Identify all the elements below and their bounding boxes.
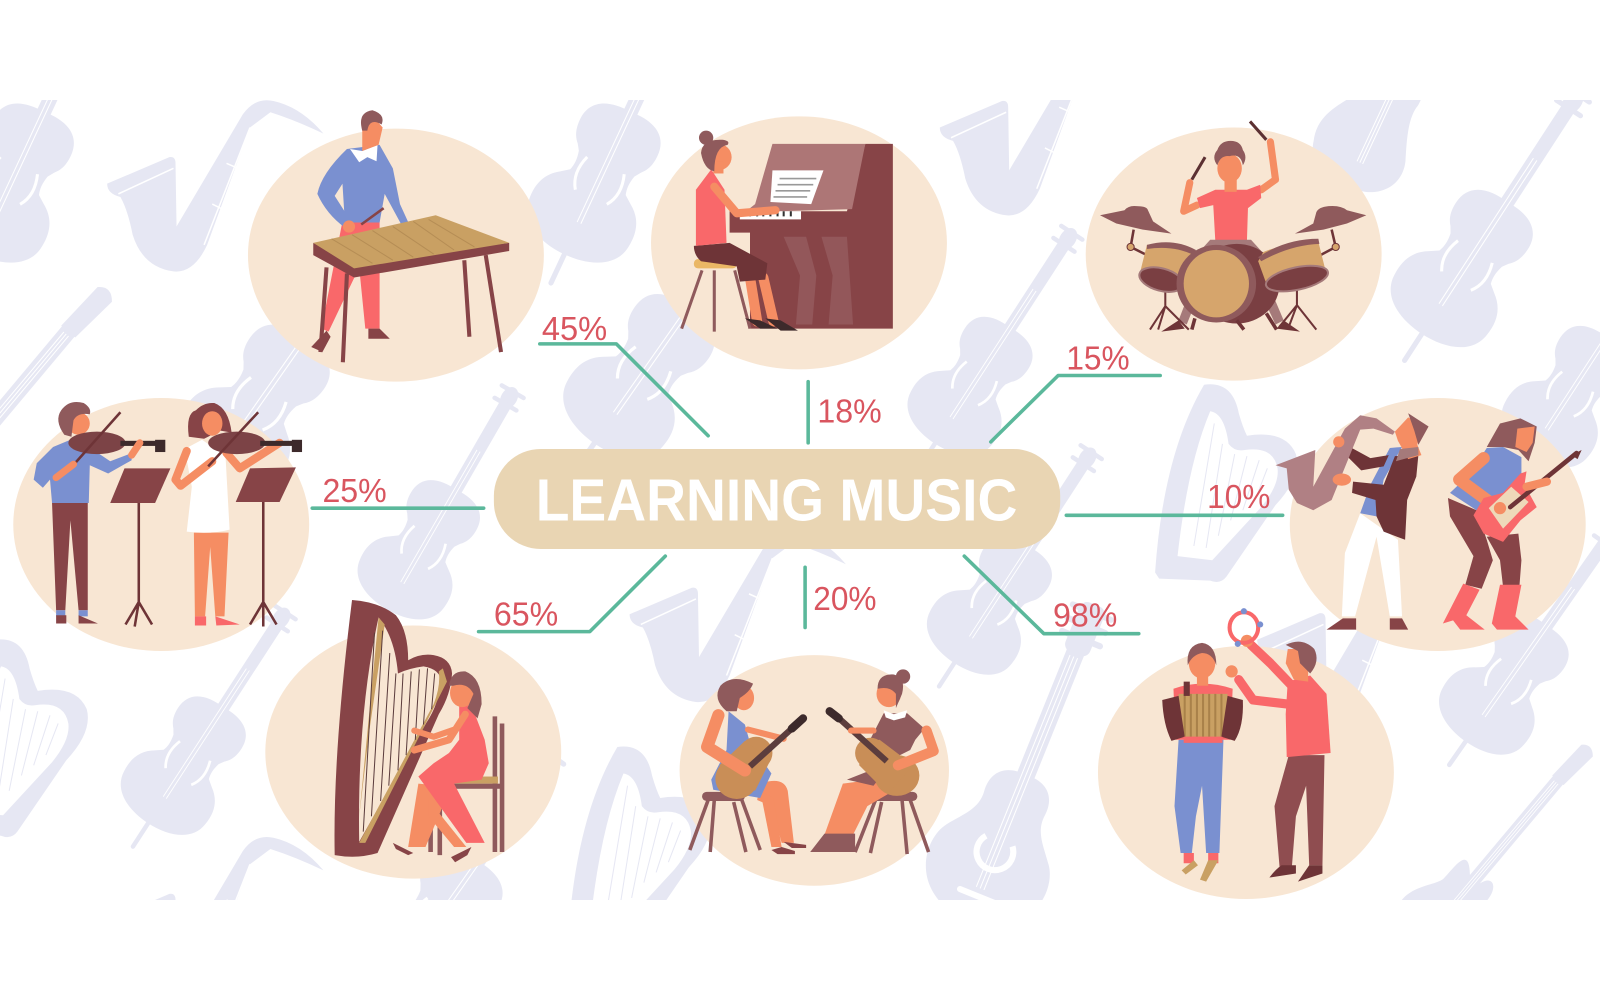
sax [1276, 415, 1395, 510]
shirt [1360, 447, 1402, 516]
guitar [1473, 471, 1537, 542]
kick drum [1177, 245, 1256, 322]
panel: accordion and tambourine [1098, 608, 1394, 899]
stands [1150, 290, 1316, 330]
harp interior [359, 617, 441, 842]
percent labels: 20% [813, 581, 877, 618]
left arm near [707, 715, 745, 770]
piano body [730, 144, 893, 329]
panel: piano player [651, 116, 947, 369]
hands and mallets [343, 220, 355, 233]
boots [1443, 584, 1485, 630]
infographic canvas [0, 100, 1600, 900]
right tom [1258, 242, 1326, 284]
boy head [67, 412, 90, 435]
sweater and arms [342, 145, 410, 230]
arms and sticks [1261, 142, 1276, 190]
percent labels [322, 311, 1270, 635]
right man arms [1251, 645, 1292, 686]
drum shell [1194, 244, 1280, 323]
pelvis [1200, 240, 1261, 251]
table legs [320, 255, 501, 362]
boy hands [132, 443, 140, 455]
stool [682, 270, 750, 332]
left man trousers [1174, 740, 1223, 853]
legs [408, 784, 451, 847]
percent labels: 18% [817, 393, 882, 430]
connector lines [312, 344, 1283, 634]
pianist legs [750, 278, 773, 321]
skirt [694, 243, 767, 282]
panel: violin duet [13, 398, 309, 651]
harp strings [363, 631, 435, 832]
head [450, 679, 474, 707]
left man head [1189, 648, 1215, 679]
girl arms [176, 451, 212, 486]
panel: guitar duo [680, 655, 949, 886]
feet [1161, 320, 1300, 332]
trousers [321, 216, 380, 332]
accordion [1179, 694, 1228, 737]
piano legs [784, 237, 853, 324]
percent labels: 10% [1207, 479, 1270, 516]
man head [1395, 417, 1421, 459]
man hands [1333, 436, 1344, 447]
torso [696, 169, 727, 246]
percent labels: 15% [1066, 340, 1130, 377]
collar [1396, 447, 1418, 461]
collar [884, 710, 907, 720]
jacket [1352, 455, 1418, 540]
man trousers [1342, 513, 1402, 616]
keyboard [740, 211, 801, 219]
left guitar [740, 737, 772, 769]
head [705, 144, 732, 170]
right head [877, 681, 901, 707]
left head [734, 686, 754, 710]
panel: xylophone player [248, 110, 544, 382]
panel: harpist [265, 600, 561, 879]
title pill [494, 449, 1060, 549]
right man trousers [1274, 755, 1324, 867]
harp frame [334, 600, 452, 857]
collar [350, 145, 378, 162]
woman face [1515, 427, 1535, 452]
girl legs [194, 533, 229, 616]
left woman dress [711, 711, 771, 798]
left tom [1140, 244, 1196, 286]
trouser legs [1179, 294, 1284, 324]
stand two [236, 467, 296, 502]
stand one [110, 468, 170, 503]
arms [414, 714, 465, 750]
percent labels: 65% [494, 597, 558, 634]
torso [1197, 185, 1261, 241]
tambourine [1230, 608, 1263, 647]
piano top panel [745, 144, 865, 212]
dress [418, 705, 489, 843]
chair [495, 716, 502, 852]
percent labels: 98% [1053, 598, 1117, 635]
left woman legs [757, 781, 794, 843]
head [362, 115, 383, 151]
boy trousers [52, 503, 88, 610]
cymbals [1100, 206, 1171, 234]
right man torso [1286, 676, 1331, 757]
woman top [1450, 447, 1521, 510]
woman arm [1459, 458, 1498, 508]
boy violin [68, 432, 126, 454]
boy torso [34, 440, 132, 503]
percent labels: 25% [322, 473, 387, 510]
title: LEARNING MUSIC [536, 466, 1017, 533]
woman legs [1448, 498, 1493, 589]
girl violin [208, 432, 265, 454]
right guitar [855, 738, 886, 768]
panel: drummer [1086, 121, 1382, 381]
table top [313, 215, 509, 268]
right man head [1286, 649, 1308, 682]
head [1224, 178, 1237, 192]
girl head [188, 403, 232, 439]
right stool [855, 800, 929, 854]
panel: saxophone and electric guitar [1276, 398, 1586, 651]
right woman legs [824, 780, 892, 835]
left man torso [1173, 684, 1233, 740]
left arm far [748, 730, 784, 739]
arm [714, 187, 776, 213]
percent labels: 45% [542, 311, 607, 348]
left stool [690, 800, 760, 852]
right woman dress [847, 713, 924, 786]
harp soundbox [359, 668, 447, 843]
sheet music [770, 170, 823, 204]
right arm [898, 731, 934, 765]
woman hair [1487, 418, 1537, 461]
boots [810, 834, 855, 852]
girl dress [185, 440, 230, 533]
table frame [313, 243, 509, 278]
background pattern of instrument silhouettes [0, 100, 1600, 900]
